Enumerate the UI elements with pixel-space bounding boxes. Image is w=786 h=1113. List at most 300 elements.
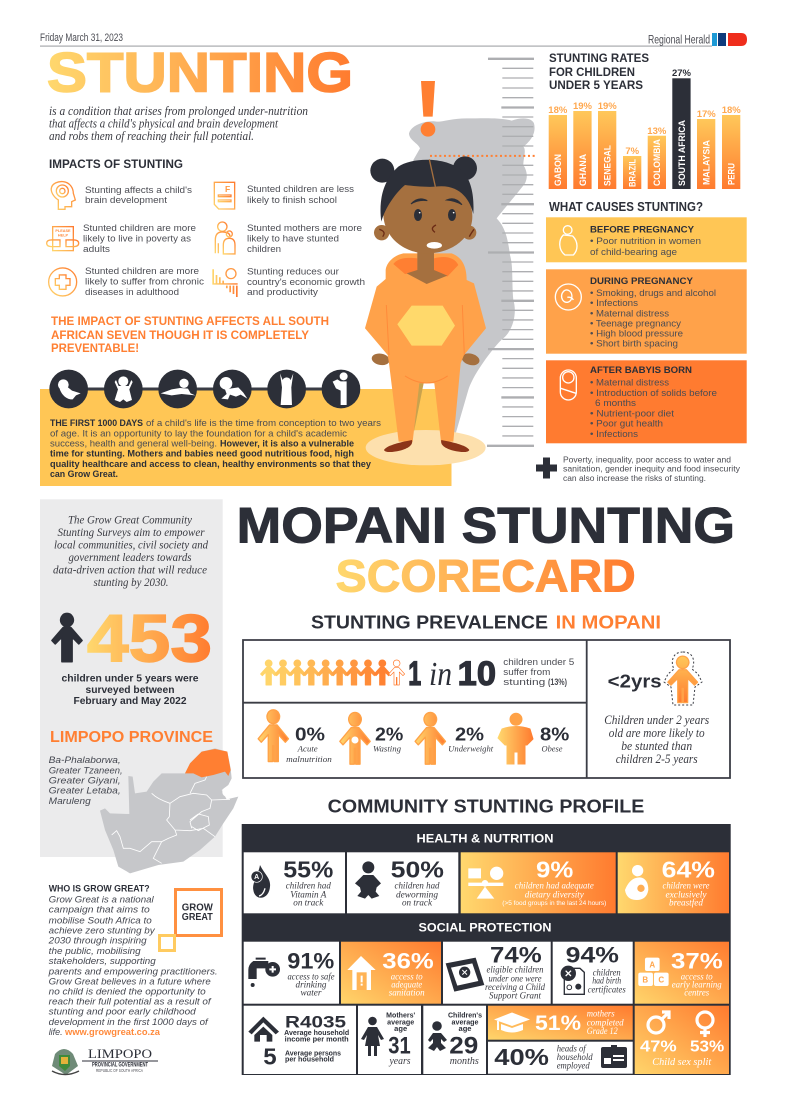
text: poverty [83, 223, 196, 255]
body text: first 1000 days: quality healthcare and access to clean, healthy environments so that they [50, 459, 372, 470]
panel: after baby is born [546, 360, 747, 443]
icon: male symbol [648, 1012, 669, 1033]
callout: impact affects all: AFRICAN SEVEN THOUGH IT IS COMPLETELY [51, 328, 309, 342]
body text: first 1000 days [50, 418, 381, 480]
hair [370, 156, 477, 222]
card: children's average age: months [450, 1056, 479, 1067]
text: before pregnancy [590, 225, 701, 258]
card: child support grant: receiving a Child [485, 982, 545, 992]
card: household employed: employed [557, 1061, 590, 1071]
bar country labels: MALAYSIA [702, 140, 712, 185]
newspaper header: Regional Herald [648, 34, 710, 46]
body text: first 1000 days: of a child's life is the time from conception to two years [146, 418, 381, 429]
icon: woman [361, 1017, 384, 1056]
card: household income: R4035 [285, 1012, 346, 1031]
card: early learning: early learning [672, 980, 722, 990]
card: mothers completed grade 12: completed [587, 1017, 624, 1027]
text: finish school: Stunted children are less [247, 184, 354, 195]
bar country labels: BRAZIL [628, 159, 638, 187]
card: deworming: on track [402, 897, 433, 907]
note: additional risk factors [536, 456, 740, 483]
Limpopo government logo [52, 1046, 158, 1075]
text: brain development: Stunting affects a child's [85, 185, 192, 196]
map: South Africa with Limpopo highlighted [100, 748, 238, 873]
box and dividers [243, 640, 730, 778]
hair parting [429, 159, 435, 187]
text: poverty: Stunted children are more [83, 223, 196, 234]
text: economic growth: country's economic growth [247, 277, 365, 288]
description text: 2030 through inspiring [48, 935, 147, 946]
card: breastfed: exclusively [666, 889, 706, 899]
card: child support grant: eligible children [486, 965, 544, 975]
survey stat caption: surveyed between [86, 684, 174, 696]
icon: mother and child [215, 222, 235, 254]
survey stat caption [62, 673, 199, 707]
text: chronic diseases: likely to suffer from chronic [85, 276, 204, 288]
description text: mobilise South Africa to [49, 915, 152, 926]
callout: impact affects all: THE IMPACT OF STUNTING AFFECTS ALL SOUTH [51, 314, 329, 328]
section heading: social protection: SOCIAL PROTECTION [418, 923, 552, 935]
card: mothers completed grade 12: Grade 12 [587, 1026, 618, 1036]
stat: under 2 years: <2yrs [608, 671, 662, 691]
text: finish school: likely to finish school [247, 195, 337, 206]
card: early learning [635, 942, 729, 1004]
icon: crawling baby [213, 370, 252, 408]
text: after baby is born: • Maternal distress [590, 378, 669, 389]
icon: plus [536, 458, 557, 478]
bars [549, 78, 740, 189]
card: dietary diversity: (>5 food groups in the last 24 hours) [502, 900, 606, 907]
survey intro text: Stunting Surveys aim to empower [58, 527, 205, 539]
panel: who is Grow Great [48, 884, 221, 1075]
card: deworming: 50% [391, 856, 444, 882]
body text: first 1000 days: can Grow Great. [50, 469, 118, 480]
section heading: health and nutrition: HEALTH & NUTRITION [416, 834, 554, 846]
card: mothers' average age: 31 [388, 1032, 411, 1059]
card: dietary diversity: children had adequate [515, 881, 594, 891]
card: household income: Average household [284, 1030, 349, 1037]
text: economic growth [247, 266, 365, 298]
heading: community stunting profile: COMMUNITY STUNTING PROFILE [328, 797, 644, 817]
card: mothers completed grade 12 [488, 1006, 633, 1040]
newspaper header [40, 32, 747, 47]
description text: stakeholders, supporting [49, 956, 156, 967]
icon: failed report [214, 182, 235, 209]
card: household income: per household [285, 1057, 334, 1064]
icon: balance scale [468, 867, 503, 899]
bar value labels: 19% [573, 101, 593, 112]
card: children's average age: Children's [448, 1013, 482, 1020]
icon: fetus in womb [555, 284, 581, 310]
survey intro text: data-driven action that will reduce [53, 565, 207, 577]
icon: toddler [428, 1021, 447, 1051]
text: stunting rate [503, 657, 574, 688]
heading: Limpopo province: LIMPOPO PROVINCE [50, 729, 213, 746]
text: after baby is born: • Infections [590, 429, 638, 440]
icon: female symbol [697, 1012, 713, 1037]
survey intro text: stunting by 2030. [94, 577, 168, 589]
card: child sex split [635, 1006, 729, 1074]
card: mothers' average age: average [387, 1019, 414, 1026]
circles with baby development silhouettes [49, 370, 360, 408]
text: after baby is born: • Introduction of solids before [590, 388, 717, 399]
heading: stunting rates: STUNTING RATES [549, 51, 649, 65]
exclamation mark [421, 81, 435, 137]
description text: no child is denied the opportunity to [49, 986, 206, 997]
icon: house [248, 1017, 279, 1042]
card: early learning: 37% [671, 948, 723, 973]
card: birth certificates: 94% [566, 943, 619, 968]
stat: 1 in 10: in [429, 656, 452, 693]
text: economic growth: and productivity [247, 287, 318, 298]
text: chronic diseases [85, 266, 204, 298]
newspaper header: Friday March 31, 2023 [40, 32, 123, 44]
card: sanitation: adequate [391, 980, 422, 990]
municipalities list: Maruleng [49, 796, 91, 807]
text: during pregnancy: • Maternal distress [590, 308, 669, 319]
height marker dotted line [430, 153, 535, 159]
text: chronic diseases: Stunted children are more [85, 266, 199, 277]
hoodie body [365, 253, 486, 442]
stat: 1 in 10: 1 [408, 655, 421, 693]
card: early learning: access to [681, 971, 713, 981]
text: stunting rate: children under 5 [503, 657, 574, 668]
description text: Grow Great believes in a future where [49, 976, 211, 987]
card: drinking water: drinking [296, 980, 327, 990]
bar value labels: 27% [672, 68, 692, 79]
description text: achieve zero stunting by [49, 925, 156, 936]
municipalities list [49, 755, 123, 807]
card: vitamin A: Vitamin A [290, 889, 327, 899]
text: during pregnancy: DURING PREGNANCY [590, 276, 694, 287]
heading: stunting rates: FOR CHILDREN [549, 65, 635, 79]
stat: acute malnutrition: Acute [297, 744, 318, 754]
heading: stunting rates [549, 51, 649, 92]
card: deworming: children had [394, 881, 440, 891]
card: drinking water [244, 942, 339, 1004]
stat: obese: 8% [540, 725, 569, 745]
card: sanitation: sanitation [389, 988, 425, 998]
icon: fetus [49, 370, 88, 408]
icon: economic decline chart [212, 269, 238, 297]
timeline connector [68, 388, 341, 390]
icon: baby lying [158, 370, 197, 408]
text: stunting rate: (13%) [548, 677, 567, 688]
stat: under 2 years: be stunted than [621, 739, 692, 753]
note: additional risk factors: sanitation, gender inequity and food insecurity [563, 465, 740, 474]
stat: wasting: Wasting [373, 744, 401, 754]
card: child support grant: Support Grant [489, 991, 541, 1001]
bar value labels: 7% [625, 146, 640, 157]
note: additional risk factors: Poverty, inequality, poor access to water and [563, 456, 731, 465]
icon: dashed outlined child [664, 652, 702, 705]
card: vitamin A: children had [286, 881, 331, 891]
stat: underweight [415, 712, 494, 764]
card: household income: Average persons [285, 1051, 341, 1058]
card: vitamin A: 55% [283, 856, 333, 882]
icon: please help sign [47, 227, 79, 251]
description text: campaign that aims to [49, 905, 150, 916]
text: after baby is born: • Nutrient-poor diet [590, 409, 674, 420]
icon: graduation cap [494, 1012, 530, 1032]
icon: swaddled baby [560, 370, 576, 400]
survey stat caption: children under 5 years were [62, 673, 199, 685]
hands [371, 352, 481, 367]
municipalities list: Greater Letaba, [49, 786, 121, 796]
heading: what causes stunting: WHAT CAUSES STUNTING? [549, 200, 703, 214]
stat: acute malnutrition: 0% [295, 725, 325, 745]
card: deworming: deworming [396, 889, 439, 899]
callout: impact affects all: PREVENTABLE! [51, 341, 139, 355]
card: sanitation: access to [391, 971, 423, 981]
panel: before pregnancy [546, 217, 747, 262]
dark table background [242, 824, 731, 1075]
text: chronic diseases: diseases in adulthood [85, 287, 179, 298]
survey intro text: local communities, civil society and [54, 540, 208, 552]
bar country labels [553, 120, 738, 187]
municipalities list: Greater Giyani, [49, 776, 121, 786]
description text: parents and empowering practitioners. [48, 966, 218, 977]
bar value labels: 19% [598, 101, 617, 112]
stat: 1 in 10 [408, 655, 496, 693]
bar country labels: SENEGAL [602, 145, 614, 186]
text: during pregnancy: • Infections [590, 298, 638, 309]
stat: wasting [340, 712, 403, 764]
card: child support grant [443, 942, 551, 1004]
card: household employed: heads of [557, 1044, 587, 1054]
icon: tap [248, 958, 280, 987]
icon: baby [355, 861, 381, 899]
text: before pregnancy: BEFORE PREGNANCY [590, 225, 695, 236]
card: birth certificates: certificates [588, 984, 626, 994]
stat: underweight: Underweight [448, 744, 494, 754]
bar country labels: SOUTH AFRICA [677, 120, 688, 186]
text: during pregnancy: • Short birth spacing [590, 339, 678, 350]
card: dietary diversity: 9% [536, 856, 573, 882]
Grow Great logo: GROW [182, 903, 213, 914]
character: stunted child with exclamation [365, 81, 535, 465]
survey intro text [53, 514, 208, 589]
bar country labels: GHANA [578, 154, 589, 186]
text: after baby is born: • Poor gut health [590, 419, 663, 430]
definition text: is a condition that arises from prolonged under-nutrition [49, 104, 308, 118]
heading: stunting prevalence in Mopani [311, 611, 661, 632]
card: child support grant: 74% [490, 943, 542, 968]
bar country labels: GABON [553, 154, 564, 186]
card: mothers' average age: years [389, 1056, 411, 1067]
text: economic growth: Stunting reduces our [247, 266, 339, 278]
body text: first 1000 days: success, health and general well-being. [50, 438, 217, 450]
ears [374, 225, 476, 240]
definition text: and robs them of reaching their full potential. [49, 129, 254, 143]
card: child support grant: under one were [488, 973, 542, 983]
text: during pregnancy: • Smoking, drugs and alcohol [590, 288, 716, 299]
Limpopo government logo: PROVINCIAL GOVERNMENT [92, 1063, 148, 1069]
card: household income: 5 [263, 1043, 277, 1069]
card: mothers' average age: Mothers' [386, 1013, 416, 1020]
text: stunting rate: suffer from [503, 667, 550, 678]
icon: toddler [322, 370, 360, 408]
icon: failed report: F [225, 184, 230, 194]
card: breastfed: breastfed [669, 897, 704, 907]
icon: certificate [561, 966, 584, 994]
definition text: that affects a child's physical and brain development [49, 116, 278, 130]
body text: first 1000 days: However, it is also a vulnerable [220, 438, 354, 450]
stat: under 2 years: children 2-5 years [616, 752, 698, 766]
Limpopo government logo: LIMPOPO [88, 1046, 152, 1061]
survey stat caption: February and May 2022 [74, 695, 187, 707]
stat: obese [498, 713, 569, 764]
card: mothers completed grade 12: mothers [587, 1009, 615, 1019]
panel: first 1000 days [40, 370, 452, 486]
icon: head with gear [51, 182, 75, 209]
title: STUNTING: STUNTING [47, 40, 353, 104]
icon: breastfeeding mother [625, 865, 648, 900]
card: birth certificates: children [593, 968, 621, 978]
icon: child [52, 614, 82, 662]
description text: the public, mobilising [49, 946, 141, 957]
text: during pregnancy: • Teenage pregnancy [590, 319, 681, 330]
text: stunted mothers [247, 223, 362, 255]
card: dietary diversity: dietary diversity [525, 889, 584, 899]
heading: Mopani stunting scorecard: MOPANI STUNTING [237, 497, 735, 553]
panel: survey sidebar [40, 499, 238, 873]
text: stunted mothers: likely to have stunted [247, 234, 339, 244]
neck [407, 243, 447, 284]
floor shadow [366, 430, 486, 465]
icon: ABC blocks: C [658, 976, 664, 984]
description text: reach their full potential as a result of [49, 997, 212, 1008]
panel: stunting rates chart [548, 51, 741, 189]
heading: stunting prevalence in Mopani: STUNTING PREVALENCE [311, 611, 548, 632]
icon: pregnant woman [560, 226, 577, 255]
description text: Grow Great is a national [49, 895, 155, 906]
panel: impacts of stunting [47, 159, 365, 298]
note: additional risk factors: can also increase the risks of stunting. [563, 474, 706, 483]
stat: 453: 453 [87, 602, 212, 677]
child shadow silhouette [409, 118, 535, 442]
callout: impact affects all [51, 314, 329, 355]
card: child sex split: 47% [640, 1039, 677, 1056]
face features [379, 199, 474, 249]
bar value labels: 18% [548, 105, 568, 116]
card: household employed: household [557, 1052, 593, 1062]
text: during pregnancy: • High blood pressure [590, 329, 683, 340]
description text: life. [49, 1027, 63, 1038]
Limpopo government logo: REPUBLIC OF SOUTH AFRICA [96, 1068, 143, 1073]
card: children's average age: 29 [449, 1032, 478, 1059]
card: children's average age: age [458, 1026, 472, 1033]
heading: stunting rates: UNDER 5 YEARS [549, 78, 643, 92]
yellow panel background [40, 389, 452, 486]
card: deworming [347, 852, 458, 913]
icon: ABC blocks: A [649, 960, 655, 970]
card: vitamin A [244, 852, 345, 913]
card: mothers' average age [358, 1006, 421, 1074]
card: birth certificates: had birth [592, 976, 622, 986]
card: household income: income per month [285, 1037, 349, 1044]
text: finish school [247, 184, 354, 206]
heading: impacts: IMPACTS OF STUNTING [49, 159, 183, 171]
text: during pregnancy [590, 276, 716, 350]
height ruler [487, 58, 534, 447]
card: household employed: 40% [494, 1044, 549, 1070]
card: breastfed: children were [662, 881, 710, 891]
icon: ABC blocks: B [642, 976, 648, 984]
stat: under 2 years: Children under 2 years [604, 713, 709, 727]
text: stunted mothers: children [247, 244, 281, 255]
bar value labels [548, 68, 741, 157]
text: after baby is born: AFTER BABYIS BORN [590, 365, 692, 376]
card: mothers completed grade 12: 51% [535, 1012, 581, 1035]
card: birth certificates [553, 942, 633, 1004]
bar value labels: 17% [697, 109, 716, 120]
hood lining [393, 257, 458, 277]
stat: acute malnutrition [258, 710, 332, 764]
card: child sex split: 53% [690, 1039, 724, 1056]
icon: toilet hut [347, 956, 376, 990]
body text: first 1000 days: of age. It is an opportunity to lay the foundation for a child's academic [50, 428, 347, 440]
head [383, 180, 472, 253]
definition text [49, 104, 308, 143]
card: drinking water: 91% [287, 948, 334, 973]
text: stunting rate: stunting [503, 677, 545, 688]
text: poverty: likely to live in poverty as [83, 234, 191, 244]
card: breastfed [618, 852, 729, 913]
stat: acute malnutrition: malnutrition [286, 754, 332, 764]
pictogram: 1 in 10 children [261, 660, 405, 685]
text: brain development [85, 185, 192, 206]
stat: 1 in 10: 10 [458, 655, 496, 693]
description text [48, 895, 218, 1038]
text: poverty: adults [83, 244, 110, 255]
municipalities list: Greater Tzaneen, [49, 766, 123, 776]
heading: Mopani stunting scorecard [237, 497, 735, 602]
bar value labels: 18% [722, 105, 741, 116]
card: vitamin A: on track [293, 897, 324, 907]
survey intro text: The Grow Great Community [68, 514, 193, 526]
icon: ABC blocks [638, 958, 669, 986]
text: after baby is born [590, 365, 717, 440]
heading: Mopani stunting scorecard: SCORECARD [336, 551, 636, 602]
card: mothers' average age: age [394, 1026, 407, 1033]
shadow between legs [414, 382, 424, 432]
Grow Great logo [160, 890, 222, 950]
panel: community profile table [242, 824, 731, 1075]
icon: please help sign: PLEASE [55, 229, 71, 233]
heading: who is Grow Great: WHO IS GROW GREAT? [49, 884, 150, 895]
card: sanitation [341, 942, 441, 1004]
stat: wasting: 2% [375, 725, 403, 745]
text: brain development: brain development [85, 195, 167, 206]
icon: ID badge [601, 1045, 627, 1068]
panel: prevalence scorecard [243, 640, 730, 778]
icon: medical cross [49, 268, 77, 296]
stat: obese: Obese [542, 744, 563, 754]
card: sanitation: 36% [382, 948, 434, 973]
icon: vitamin drop: A [254, 874, 259, 881]
body text: first 1000 days: THE FIRST 1000 DAYS [50, 418, 143, 429]
sidebar background [40, 499, 223, 857]
icon: please help sign: HELP [58, 234, 69, 238]
survey intro text: government leaders towards [68, 552, 192, 564]
card: breastfed: 64% [662, 856, 715, 882]
card: household employed [488, 1042, 633, 1074]
municipalities list: Ba-Phalaborwa, [49, 755, 121, 766]
card: household income [244, 1006, 356, 1074]
stat: underweight: 2% [455, 725, 484, 745]
icon: standing baby arms up [267, 370, 306, 408]
